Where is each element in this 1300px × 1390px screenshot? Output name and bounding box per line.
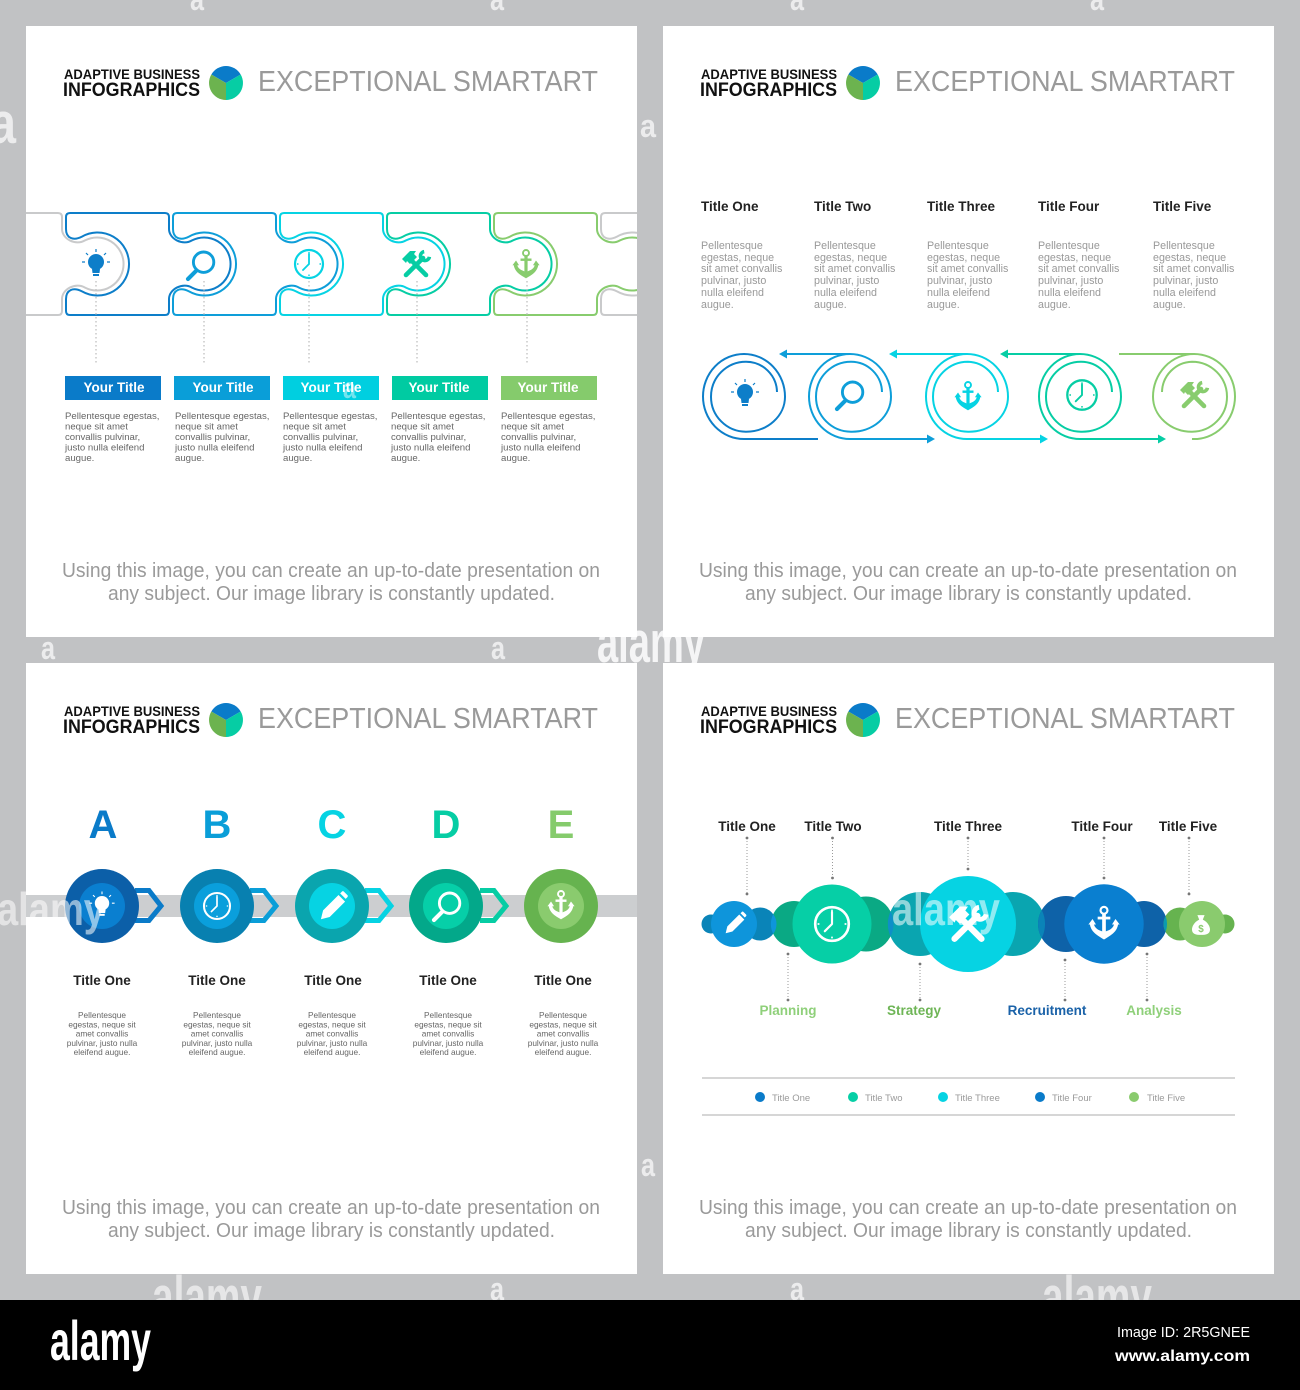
watermarks: alamy — [152, 1265, 262, 1330]
spiral 5 — [1119, 354, 1235, 439]
description columns: egestas, neque — [701, 252, 774, 264]
step B: B — [203, 803, 231, 847]
column 5 — [500, 376, 597, 464]
step B: Title One — [188, 973, 246, 988]
description columns: pulvinar, justo — [814, 275, 879, 287]
bottom labels: Analysis — [1126, 1003, 1182, 1018]
spiral 1 — [703, 354, 818, 439]
bubble chain — [702, 876, 1234, 972]
step E: amet convallis — [537, 1029, 589, 1039]
top titles: Title Two — [804, 819, 862, 834]
header: spiral panel — [700, 66, 1235, 101]
top titles: Title Three — [934, 819, 1002, 834]
column 4: convallis pulvinar, — [391, 432, 466, 443]
step C — [295, 803, 391, 1057]
icon: magnifier — [188, 252, 214, 279]
step C: Title One — [304, 973, 362, 988]
icon: tools — [949, 906, 986, 939]
step D — [409, 803, 506, 1057]
titles row: Title Five — [1153, 199, 1212, 214]
panel: puzzle process — [0, 26, 664, 637]
gray band — [26, 895, 637, 917]
column 2 — [174, 376, 270, 464]
column 2: convallis pulvinar, — [175, 432, 250, 443]
description columns: Pellentesque — [701, 240, 763, 252]
top titles — [718, 819, 1218, 834]
description columns: egestas, neque — [927, 252, 1000, 264]
column 3: neque sit amet — [283, 422, 346, 432]
legend: Title Five — [1147, 1093, 1185, 1104]
step A: egestas, neque sit — [68, 1019, 136, 1029]
column 5: Pellentesque egestas, — [501, 411, 595, 422]
icon: tools — [402, 251, 429, 275]
step D: egestas, neque sit — [414, 1019, 482, 1029]
panel: bubble timeline — [663, 663, 1274, 1274]
column 1: justo nulla eleifend — [64, 442, 144, 454]
step A: Pellentesque — [78, 1010, 126, 1020]
legend — [702, 1078, 1235, 1115]
step C: C — [318, 803, 346, 847]
description columns: augue. — [1153, 299, 1186, 311]
watermarks: a — [491, 630, 505, 666]
legend: Title Four — [1052, 1093, 1092, 1104]
description columns: Pellentesque — [1038, 240, 1100, 252]
bottom labels: Strategy — [887, 1003, 941, 1018]
step C: pulvinar, justo nulla — [297, 1038, 368, 1048]
top titles: Title Five — [1159, 819, 1218, 834]
watermarks: alamy — [1042, 1265, 1152, 1330]
column 3: Your Title — [300, 380, 362, 395]
step E: pulvinar, justo nulla — [528, 1038, 599, 1048]
column 1: Pellentesque egestas, — [65, 411, 159, 422]
description columns: pulvinar, justo — [701, 275, 766, 287]
step E: egestas, neque sit — [529, 1019, 597, 1029]
watermarks: a — [41, 630, 55, 666]
step A: pulvinar, justo nulla — [67, 1038, 138, 1048]
step C: amet convallis — [306, 1029, 358, 1039]
watermarks: alamy — [0, 883, 105, 935]
watermarks: alamy — [892, 883, 1000, 935]
column 2: Pellentesque egestas, — [175, 411, 269, 422]
icon: clock — [815, 907, 849, 941]
step C: Pellentesque — [308, 1010, 356, 1020]
description columns: nulla eleifend — [1038, 287, 1101, 299]
step B: egestas, neque sit — [183, 1019, 251, 1029]
top titles: Title Four — [1071, 819, 1133, 834]
spiral 4 with arrows — [1000, 350, 1166, 444]
top titles: Title One — [718, 819, 776, 834]
header: bubble panel — [700, 703, 1235, 738]
header: puzzle panel — [63, 66, 598, 101]
description columns: Pellentesque — [814, 240, 876, 252]
step C: egestas, neque sit — [298, 1019, 366, 1029]
step D: D — [432, 803, 460, 847]
step D: Pellentesque — [424, 1010, 472, 1020]
description columns: Pellentesque — [927, 240, 989, 252]
step A: amet convallis — [76, 1029, 128, 1039]
column 5: convallis pulvinar, — [501, 432, 576, 443]
column 3 — [282, 376, 379, 464]
step D: Title One — [419, 973, 477, 988]
titles row: Title Four — [1038, 199, 1100, 214]
step D: eleifend augue. — [420, 1047, 476, 1057]
description columns: nulla eleifend — [1153, 287, 1216, 299]
icon: clock — [295, 250, 323, 278]
description columns: sit amet convallis — [814, 263, 895, 275]
spiral 2 with arrows — [779, 350, 935, 444]
column 4 — [390, 376, 488, 464]
column 5: Your Title — [517, 380, 579, 395]
description columns: Pellentesque — [1153, 240, 1215, 252]
column 2: augue. — [175, 453, 204, 464]
bottom labels — [760, 1003, 1182, 1018]
titles row: Title Two — [814, 199, 871, 214]
column 2: justo nulla eleifend — [174, 442, 254, 454]
step A — [65, 803, 161, 1057]
column 4: neque sit amet — [391, 422, 454, 432]
description columns: nulla eleifend — [927, 287, 990, 299]
step A: Title One — [73, 973, 131, 988]
icon: anchor — [513, 250, 539, 278]
column 1: augue. — [65, 453, 94, 464]
step A: A — [89, 803, 117, 847]
description columns: egestas, neque — [814, 252, 887, 264]
description columns: pulvinar, justo — [1038, 275, 1103, 287]
icon: pencil — [726, 912, 746, 933]
step E: Title One — [534, 973, 592, 988]
description columns: nulla eleifend — [701, 287, 764, 299]
puzzle chain — [0, 213, 664, 315]
description columns: egestas, neque — [1038, 252, 1111, 264]
column 1 — [64, 376, 161, 464]
footer text — [62, 560, 600, 605]
column 4: Your Title — [408, 380, 470, 395]
footer text — [699, 1197, 1237, 1242]
watermarks: a — [343, 372, 356, 405]
column 3: augue. — [283, 453, 312, 464]
description columns: pulvinar, justo — [927, 275, 992, 287]
step C: eleifend augue. — [304, 1047, 360, 1057]
column 1: Your Title — [83, 380, 145, 395]
column 4: Pellentesque egestas, — [391, 411, 485, 422]
icon: money bag: $ — [1198, 924, 1204, 935]
step E: E — [548, 803, 574, 847]
legend: Title Three — [955, 1093, 1000, 1104]
step E: eleifend augue. — [535, 1047, 591, 1057]
column 1: convallis pulvinar, — [65, 432, 140, 443]
column 3: convallis pulvinar, — [283, 432, 358, 443]
spiral 3 with arrows — [889, 350, 1048, 444]
column 1: neque sit amet — [65, 422, 128, 432]
description columns: sit amet convallis — [927, 263, 1008, 275]
watermarks: a — [790, 1271, 804, 1307]
description columns — [701, 240, 1234, 311]
top leaders — [746, 837, 1190, 895]
header: steps panel — [63, 703, 598, 738]
column 5: justo nulla eleifend — [500, 442, 580, 454]
description columns: augue. — [701, 299, 734, 311]
description columns: augue. — [1038, 299, 1071, 311]
titles row — [701, 199, 1212, 214]
watermarks: alamy — [597, 610, 705, 675]
description columns: sit amet convallis — [1153, 263, 1234, 275]
panel: ABCDE steps — [26, 663, 637, 1274]
column 5: augue. — [501, 453, 530, 464]
footer text — [62, 1197, 600, 1242]
bottom labels: Recruitment — [1008, 1003, 1087, 1018]
step D: pulvinar, justo nulla — [413, 1038, 484, 1048]
step E: Pellentesque — [539, 1010, 587, 1020]
column 2: Your Title — [192, 380, 254, 395]
column 2: neque sit amet — [175, 422, 238, 432]
icon: anchor — [1089, 907, 1119, 939]
website: www.alamy.com — [1114, 1348, 1250, 1365]
titles row: Title One — [701, 199, 759, 214]
watermarks: a — [490, 1271, 504, 1307]
black footer bar — [0, 1300, 1300, 1390]
column 3: Pellentesque egestas, — [283, 411, 377, 422]
description columns: pulvinar, justo — [1153, 275, 1218, 287]
step B: amet convallis — [191, 1029, 243, 1039]
image id: Image ID: 2R5GNEE — [1117, 1324, 1250, 1341]
step B: eleifend augue. — [189, 1047, 245, 1057]
alamy logo: alamy — [50, 1309, 151, 1372]
description columns: augue. — [814, 299, 847, 311]
description columns: egestas, neque — [1153, 252, 1226, 264]
bottom labels: Planning — [760, 1003, 816, 1018]
footer text — [699, 560, 1237, 605]
step B: Pellentesque — [193, 1010, 241, 1020]
step B: pulvinar, justo nulla — [182, 1038, 253, 1048]
column 4: augue. — [391, 453, 420, 464]
step D: amet convallis — [422, 1029, 474, 1039]
titles row: Title Three — [927, 199, 996, 214]
dotted leaders — [96, 281, 527, 363]
description columns: sit amet convallis — [701, 263, 782, 275]
legend: Title Two — [865, 1093, 902, 1104]
description columns: augue. — [927, 299, 960, 311]
panel: spiral process — [663, 26, 1274, 637]
description columns: nulla eleifend — [814, 287, 877, 299]
legend: Title One — [772, 1093, 810, 1104]
step E — [524, 803, 599, 1057]
column 5: neque sit amet — [501, 422, 564, 432]
step A: eleifend augue. — [74, 1047, 130, 1057]
icon: money bag — [1192, 915, 1210, 935]
watermarks: a — [640, 108, 656, 144]
column 3: justo nulla eleifend — [282, 442, 362, 454]
bottom leaders — [787, 953, 1148, 1001]
step B — [180, 803, 276, 1057]
description columns: sit amet convallis — [1038, 263, 1119, 275]
icon: bulb — [82, 249, 110, 276]
watermarks: a — [641, 1147, 655, 1183]
column 4: justo nulla eleifend — [390, 442, 470, 454]
